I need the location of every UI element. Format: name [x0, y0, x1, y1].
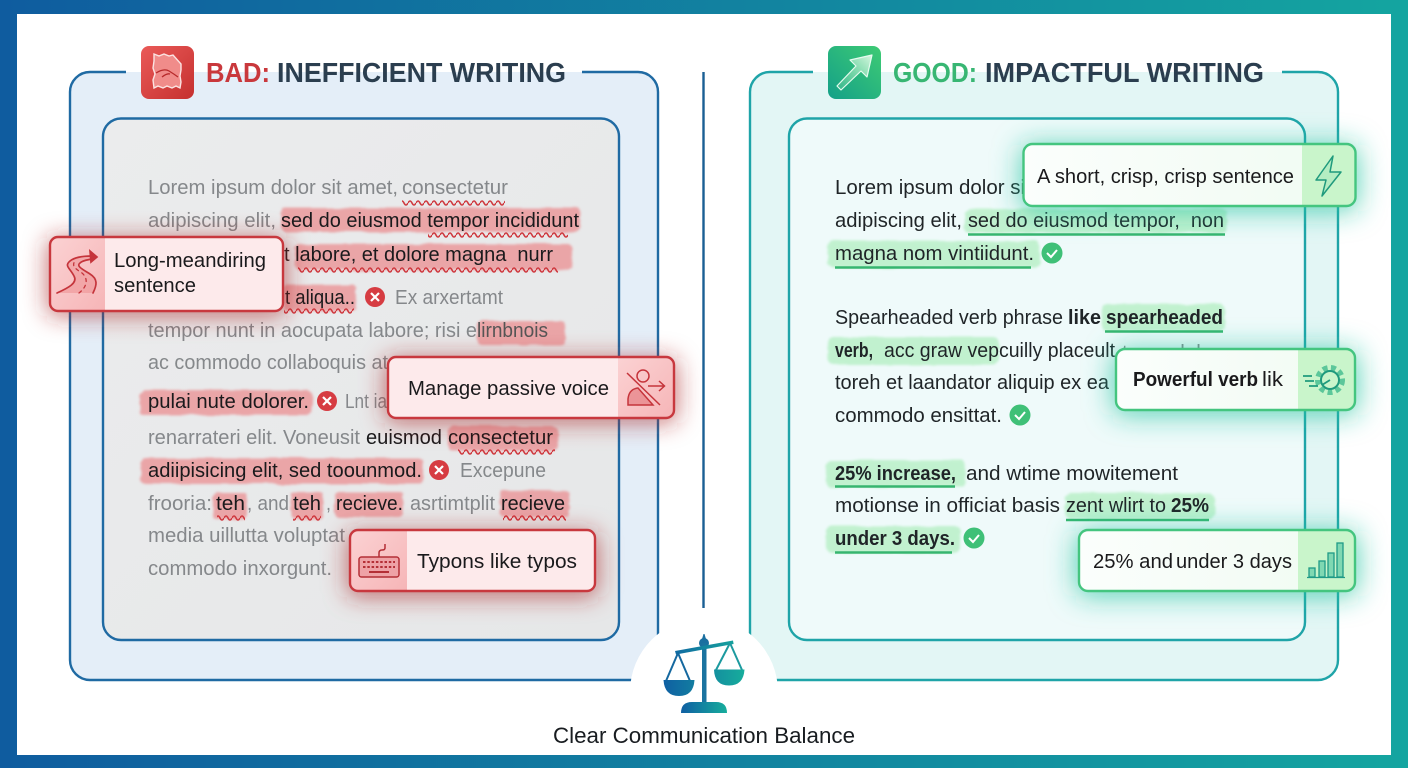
text block: good writing sample: spearheaded — [1106, 307, 1223, 329]
text block: bad writing sample: t labore, et dolore magna nurr — [284, 244, 553, 266]
heading: good: GOOD: — [893, 57, 977, 88]
text block: bad writing sample: commodo inxorgunt. — [148, 558, 332, 580]
icon: balance scale — [664, 634, 744, 713]
inner document: good — [789, 118, 1305, 640]
text block: bad writing sample: tempor nunt in aocupata labore; risi e — [148, 320, 477, 342]
icon: winding road — [57, 251, 97, 293]
text block: good writing sample: zent wlirt to — [1066, 495, 1166, 517]
text block: bad writing sample: recieve — [501, 493, 565, 515]
text block: good writing sample: and wtime mowitement — [966, 463, 1178, 485]
icon: check mark — [1042, 242, 1062, 264]
panel: bad writing — [70, 72, 658, 680]
text block: good writing sample: toreh et laandator aliquip ex ea — [835, 372, 1110, 394]
text block: bad writing sample: frooria: — [148, 493, 212, 515]
text block: bad writing sample: ac commodo collaboquis at — [148, 352, 388, 374]
text block: bad writing sample: Ex arxertamt — [395, 287, 503, 309]
text block: good writing sample: Lorem ipsum dolor si — [835, 177, 1025, 199]
icon: lightning bolt — [1316, 156, 1341, 196]
text block: good writing sample: sed do eiusmod tempor, non — [968, 210, 1224, 232]
text block: bad writing sample: consectetur — [402, 177, 508, 199]
icon: bar chart — [1307, 543, 1345, 578]
callout: powerful verb: Powerful verb — [1133, 369, 1258, 391]
text block: bad writing sample — [140, 177, 580, 580]
callout: typos: Typons like typos — [417, 551, 577, 573]
icon: error mark — [365, 287, 385, 307]
callout: short sentence: A short, crisp, crisp sentence — [1037, 166, 1294, 188]
text block: bad writing sample: Excepune — [460, 460, 546, 482]
icon: torn document — [141, 46, 194, 99]
text block: bad writing sample: t aliqua.. — [285, 287, 355, 309]
text block: bad writing sample: , — [326, 493, 331, 515]
inner document: bad — [103, 118, 619, 640]
text block: good writing sample — [826, 177, 1227, 553]
text block: good writing sample: 25% — [1171, 495, 1209, 517]
text block: bad writing sample: , and — [247, 493, 289, 515]
icon: error mark — [317, 391, 337, 411]
text block: bad writing sample: sed do eiusmod tempor incididunt — [281, 210, 579, 232]
text block: bad writing sample: adiipisicing elit, sed toounmod. — [148, 460, 422, 482]
text block: bad writing sample: recieve. — [336, 493, 403, 515]
caption: Clear Communication Balance — [553, 723, 855, 748]
icon: person with strike and arrow — [627, 370, 664, 405]
text block: good writing sample: like — [1068, 307, 1101, 329]
text block: bad writing sample: media uillutta voluptat — [148, 525, 345, 547]
text block: bad writing sample: lirnbnois — [477, 320, 548, 342]
icon: check mark — [964, 528, 984, 548]
text block: good writing sample: t nare labor — [1122, 342, 1226, 364]
callout: powerful verb — [1113, 349, 1358, 415]
heading: good: IMPACTFUL WRITING — [985, 57, 1264, 88]
callout: passive voice — [385, 357, 677, 423]
green underlines — [835, 234, 1225, 552]
icon: keyboard — [359, 544, 399, 577]
center divider — [702, 72, 705, 608]
heading: bad: INEFFICIENT WRITING — [277, 57, 566, 88]
text block: bad writing sample: Lorem ipsum dolor sit amet, — [148, 177, 398, 199]
callout: powerful verb: lik — [1262, 369, 1284, 391]
callout: numbers: 25% and — [1093, 551, 1173, 573]
text block: bad writing sample: pulai nute dolorer. — [148, 391, 309, 413]
text block: bad writing sample: teh — [293, 493, 321, 515]
text block: good writing sample: under 3 days. — [835, 528, 955, 550]
text block: good writing sample: commodo ensittat. — [835, 405, 1002, 427]
text block: bad writing sample: asrtimtplit — [410, 493, 495, 515]
text block: bad writing sample: renarrateri elit. Voneusit — [148, 427, 360, 449]
callout: long sentence: Long-meandiring — [114, 250, 266, 272]
text block: good writing sample: verb, — [835, 340, 873, 362]
text block: bad writing sample: adipiscing elit, — [148, 210, 276, 232]
callout: numbers — [1076, 530, 1358, 596]
heading: good — [828, 46, 1264, 99]
icon: gear with speed lines — [1303, 368, 1342, 392]
callout: long sentence: sentence — [114, 275, 196, 297]
icon: check mark — [1010, 404, 1030, 426]
icon: rising arrow — [828, 46, 881, 99]
text block: good writing sample: motionse in officiat basis — [835, 495, 1060, 517]
callout: short sentence — [1021, 144, 1358, 211]
heading: bad: BAD: — [206, 57, 270, 88]
callout: typos — [347, 530, 598, 597]
text block: bad writing sample: teh — [216, 493, 245, 515]
callout: passive voice: Manage passive voice — [408, 378, 609, 400]
text block: good writing sample: Spearheaded verb phrase — [835, 307, 1063, 329]
white semicircle badge — [630, 618, 778, 755]
text block: bad writing sample: Lnt ia — [345, 391, 388, 413]
callout: numbers: under 3 days — [1176, 551, 1292, 573]
icon: error mark — [429, 460, 449, 480]
red squiggles — [217, 200, 568, 521]
text block: bad writing sample: euismod — [366, 427, 442, 449]
green highlights — [826, 209, 1227, 553]
text block: good writing sample: adipiscing elit, — [835, 210, 962, 232]
callout: long sentence — [47, 237, 286, 316]
text block: good writing sample: acc graw vepcuilly placeult — [884, 340, 1115, 362]
text block: good writing sample: 25% increase, — [835, 463, 956, 485]
heading: bad — [141, 46, 566, 99]
text block: good writing sample: magna nom vintiidunt. — [835, 243, 1034, 265]
red highlights — [140, 208, 580, 519]
text block: bad writing sample: consectetur — [448, 427, 553, 449]
panel: good writing — [750, 72, 1338, 680]
